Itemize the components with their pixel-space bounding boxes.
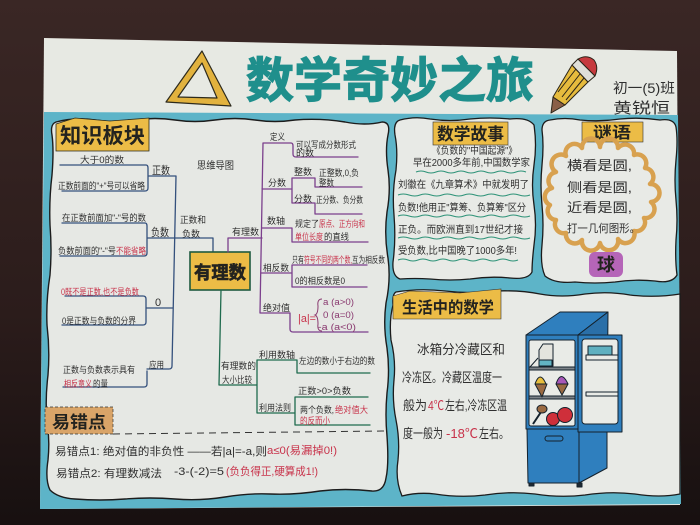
branch: rational number classification: 原点、正方向和 [319, 218, 365, 229]
title: 数学奇妙之旅 [246, 55, 534, 108]
life text [402, 342, 509, 441]
center node: rational numbers: 有理数 [194, 263, 246, 283]
branch: rational number classification: 规定了 [295, 218, 319, 229]
branch: rational number classification: 可以写成分数形式 [296, 139, 356, 150]
branch: positive and negative numbers: 正数前面的"+"号可以省略 [58, 180, 145, 191]
branch: positive and negative numbers: 相反意义 [64, 378, 92, 389]
branch: rational number classification: 正分数、负分数 [316, 194, 363, 205]
branch: positive and negative numbers: 在正数前面加"-"号的数 [62, 212, 146, 223]
branch: comparing rational numbers: 利用数轴 [259, 349, 295, 360]
panel: knowledge mind map [45, 118, 389, 500]
branch: rational number classification: 符号不同的两个数, [304, 254, 352, 265]
branch: rational number classification: 整数 [294, 166, 312, 177]
ice creams [535, 377, 546, 384]
story text: 刘徽在《九章算术》中就发明了 [398, 178, 529, 191]
branch: positive and negative numbers: 应用 [149, 359, 164, 370]
heading: math story: 数学故事 [437, 124, 504, 144]
heading: common mistakes [45, 407, 113, 434]
branch: rational number classification: 0的相反数是0 [295, 275, 345, 286]
lower compartment [527, 429, 579, 483]
story text: 《负数的"中国起源"》 [432, 144, 517, 157]
branch: rational number classification: 相反数 [263, 262, 289, 273]
riddle text: 横看是圆, [567, 158, 632, 173]
answer: sphere: 球 [597, 255, 615, 275]
branch: rational number classification: 分数 [268, 177, 286, 188]
branch: positive and negative numbers: 0是正数与负数的分界 [62, 315, 136, 326]
branch: comparing rational numbers: 有理数的 [221, 360, 256, 371]
life text: 度一般为 [403, 426, 443, 441]
branch: rational number classification: 的直线 [324, 231, 349, 242]
branch: positive and negative numbers: 正数与负数表示具有 [63, 364, 135, 375]
heading: common mistakes: 易错点 [52, 413, 106, 432]
author: class and name [613, 80, 675, 117]
heading: math in life: 生活中的数学 [402, 298, 494, 317]
icon: open refrigerator [526, 312, 622, 487]
branch: positive and negative numbers: 负数 [182, 228, 200, 239]
branch: rational number classification: 只有 [292, 254, 304, 265]
apples [546, 412, 560, 426]
formula: absolute value [298, 297, 356, 332]
life text: 冰箱分冷藏区和 [417, 342, 505, 357]
branch: rational number classification: 的数 [296, 147, 314, 158]
story text: 负数!他用正"算筹、负算筹"区分 [398, 201, 526, 214]
branch: rational number classification: 正整数,0,负 [319, 167, 359, 178]
orange cloud frame [545, 139, 660, 251]
panel: math story [393, 118, 536, 280]
riddle text: 近看是圆, [567, 200, 632, 215]
story text [398, 144, 530, 261]
branch: rational number classification: 整数 [319, 177, 334, 188]
branch: positive and negative numbers: 0既不是正数,也不是负数 [61, 286, 139, 297]
open door [578, 335, 622, 432]
formula: absolute value: -a (a<0) [318, 322, 356, 332]
branch: rational number classification: 互为相反数 [352, 254, 385, 265]
heading: riddle: 谜语 [593, 124, 631, 142]
story text: 受负数,比中国晚了1000多年! [398, 244, 517, 257]
branch: comparing rational numbers [219, 290, 375, 426]
branch: rational number classification: 定义 [270, 131, 285, 142]
riddle text [567, 158, 640, 235]
branch: positive and negative numbers: 不能省略 [116, 245, 146, 256]
branch: positive and negative numbers: 负数 [151, 225, 169, 239]
branch: positive and negative numbers: 0 [155, 297, 161, 309]
life text: -18℃ [446, 426, 478, 441]
header: title area [166, 51, 675, 117]
branch: positive and negative numbers [58, 154, 213, 389]
panel outline [46, 118, 389, 500]
branch: rational number classification: 数轴 [267, 215, 285, 226]
branch: comparing rational numbers: 绝对值大 [335, 404, 368, 415]
branch: rational number classification: 分数 [294, 193, 312, 204]
heading: riddle [582, 122, 643, 142]
branch: rational number classification: 绝对值 [263, 302, 290, 313]
formula: absolute value: 0 (a=0) [323, 310, 354, 320]
life text: 左右,冷冻区温 [445, 398, 507, 413]
branch: rational number classification: 有理数 [232, 226, 259, 237]
riddle text: 打一几何图形。 [567, 221, 640, 235]
life text: 4℃ [428, 398, 444, 413]
mistake 2: (负负得正,硬算成1!) [226, 464, 318, 478]
branch: comparing rational numbers: 利用法则 [259, 402, 291, 413]
author: class and name: 初一(5)班 [613, 80, 675, 96]
branch: comparing rational numbers: 正数>0>负数 [298, 385, 351, 396]
drumstick [533, 412, 541, 424]
shelves [529, 367, 575, 370]
heading: knowledge block: 知识板块 [60, 125, 145, 148]
heading: math in life [393, 289, 501, 319]
branch: positive and negative numbers: 的量 [93, 378, 108, 389]
formula: absolute value: a (a>0) [323, 297, 354, 307]
branch: comparing rational numbers: 的反而小 [300, 415, 330, 426]
milk carton [539, 344, 553, 366]
heading: knowledge block [56, 118, 149, 151]
mistake 2: 易错点2: 有理数减法 [56, 466, 162, 480]
formula: absolute value: |a|= [298, 313, 316, 325]
story text: 正负。而欧洲直到17世纪才接 [398, 223, 523, 236]
life text: 般为 [403, 398, 427, 413]
branch: positive and negative numbers: 大于0的数 [80, 154, 124, 165]
mistake 2: -3-(-2)=5 [174, 466, 224, 478]
life text: 左右。 [479, 426, 509, 441]
branch: rational number classification [228, 131, 385, 332]
riddle text: 侧看是圆, [567, 180, 632, 195]
branch: positive and negative numbers: 正数 [152, 164, 170, 177]
icon: yellow triangle [166, 51, 231, 106]
teal border band [40, 112, 681, 509]
panel: riddle [541, 118, 677, 283]
icon: pencil [551, 57, 597, 113]
panel: math in life [390, 289, 680, 496]
life text: 冷冻区。冷藏区温度一 [402, 370, 502, 385]
branch: rational number classification: 单位长度 [295, 231, 323, 242]
branch: comparing rational numbers: 大小比较 [222, 374, 252, 385]
life outline [390, 290, 680, 496]
caption: mind map: 思维导图 [197, 159, 234, 172]
riddle outline [541, 118, 677, 283]
mistake 2 [56, 464, 318, 480]
mistake 1: a≤0(易漏掉0!) [267, 443, 337, 457]
author: class and name: 黄锐恒 [613, 100, 670, 117]
branch: positive and negative numbers: 负数前面的"-"号 [58, 245, 116, 256]
center node: rational numbers [190, 252, 250, 290]
branch: comparing rational numbers: 两个负数, [300, 404, 334, 415]
branch: positive and negative numbers: 正数和 [180, 214, 206, 225]
story outline [393, 118, 536, 280]
story text: 早在2000多年前,中国数学家 [413, 156, 530, 169]
branch: comparing rational numbers: 左边的数小于右边的数 [299, 355, 375, 366]
mistake 1 [55, 443, 337, 458]
mistake 1: 易错点1: 绝对值的非负性 ——若|a|=-a,则 [55, 444, 267, 458]
answer: sphere [589, 252, 623, 277]
